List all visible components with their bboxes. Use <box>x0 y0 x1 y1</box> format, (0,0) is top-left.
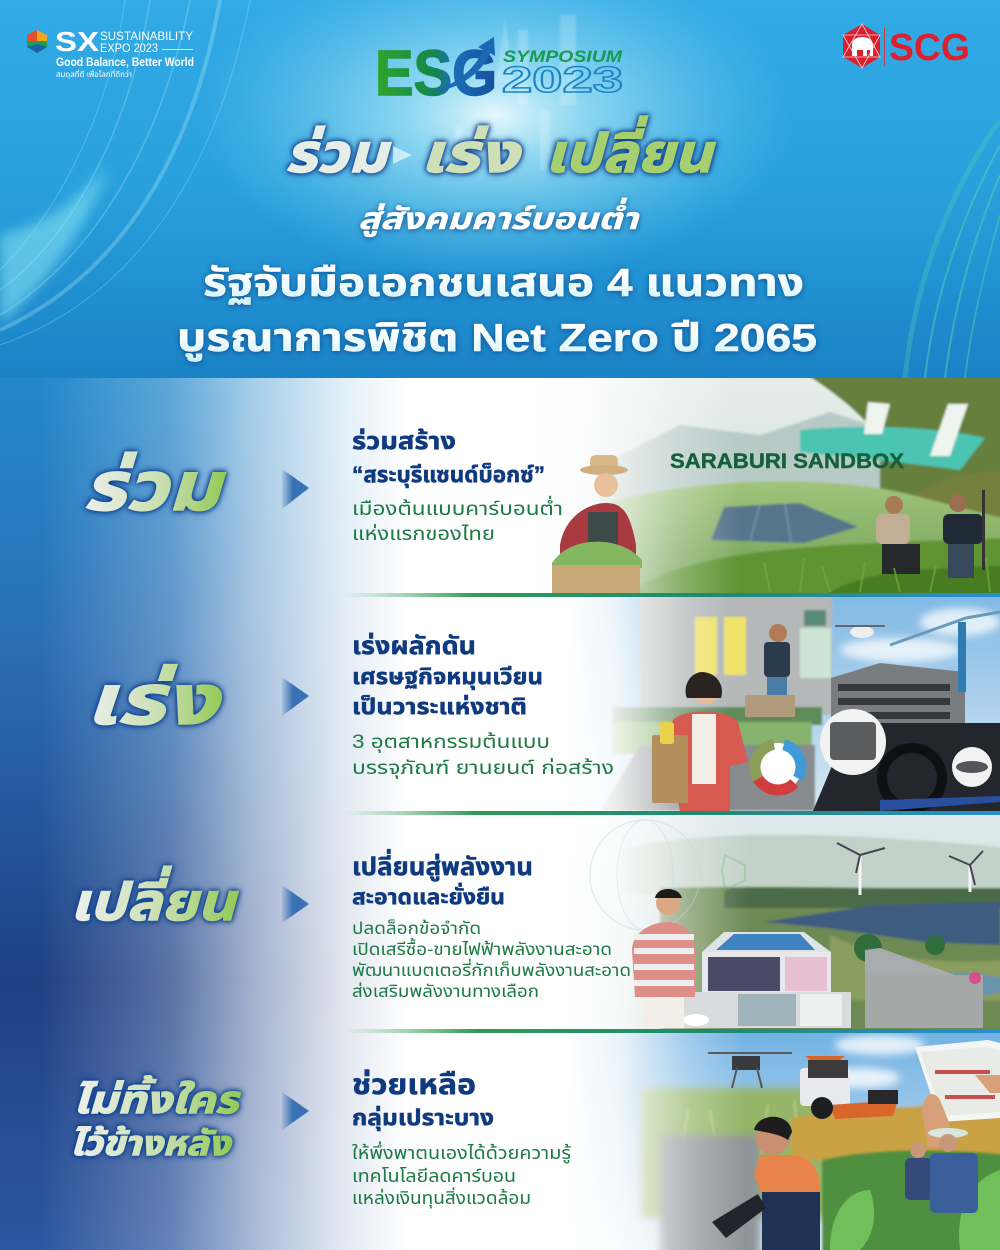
logo: SX Sustainability Expo: SX <box>55 26 99 57</box>
storage container <box>865 948 983 1028</box>
row 1 text: แห่งแรกของไทย <box>352 522 495 545</box>
farmer <box>552 455 642 593</box>
row 4 arrow <box>282 1092 309 1130</box>
logo: SX Sustainability Expo: SUSTAINABILITY <box>100 29 193 43</box>
hand with tablet <box>915 1040 1000 1147</box>
row 2 label: เร่ง <box>85 661 222 739</box>
combine harvester <box>800 1056 898 1119</box>
row 2 text <box>352 632 614 779</box>
row 3 text <box>352 849 631 1001</box>
leaves ground <box>830 1170 1000 1250</box>
row 4 text: ให้พึ่งพาตนเองได้ด้วยความรู้ <box>352 1141 571 1165</box>
car interior <box>813 723 1000 811</box>
row 4 label: ไม่ทิ้งใคร <box>73 1075 241 1122</box>
row 4 text: แหล่งเงินทุนสิ่งแวดล้อม <box>352 1187 531 1209</box>
building and crane <box>831 612 1000 730</box>
logo: SX Sustainability Expo: EXPO 2023 <box>100 41 158 55</box>
row 3 text: เปิดเสรีซื้อ-ขายไฟฟ้าพลังงานสะอาด <box>352 937 612 959</box>
logo: SCG <box>843 24 970 69</box>
panel: scene 4 vulnerable groups image <box>565 1025 1000 1250</box>
product circles <box>820 709 992 787</box>
woman with bag <box>652 672 748 811</box>
row 2 text: เป็นวาระแห่งชาติ <box>352 694 527 719</box>
logo: ESG Symposium 2023: ESG <box>375 37 497 109</box>
heading: join accelerate transform: ร่วม <box>285 124 392 184</box>
panel: header background <box>0 0 1000 378</box>
panel: scene 1 Saraburi sandbox image <box>552 378 1000 593</box>
subheading: สู่สังคมคาร์บอนต่ำ <box>358 197 640 237</box>
row 4 label <box>70 1075 241 1163</box>
logo: ESG Symposium 2023 <box>375 37 623 109</box>
drone <box>708 1052 792 1088</box>
two workers <box>876 490 985 578</box>
row 4 text <box>352 1069 571 1209</box>
label: Saraburi Sandbox: SARABURI SANDBOX <box>670 450 904 473</box>
logo: SCG: SCG <box>889 27 970 69</box>
circular economy wheel <box>750 739 807 796</box>
title <box>177 262 817 361</box>
panel: left column gradient <box>0 378 420 1250</box>
house cutaway <box>683 932 851 1028</box>
row 3 text: พัฒนาแบตเตอรี่กักเก็บพลังงานสะอาด <box>352 958 631 980</box>
title: บูรณาการพิชิต Net Zero ปี 2065 <box>177 317 817 361</box>
row 3 arrow <box>282 885 309 923</box>
row 2 arrow <box>282 677 309 716</box>
logo: ESG Symposium 2023: SYMPOSIUM <box>503 47 623 66</box>
row 1 label: ร่วม <box>83 449 226 525</box>
heading: join accelerate transform <box>285 116 716 184</box>
man with phone <box>632 889 695 1028</box>
logo: SX Sustainability Expo: Good Balance, Better World <box>56 55 194 69</box>
heading: join accelerate transform: เร่ง <box>420 124 522 184</box>
panel: scene 2 circular economy image <box>586 597 1000 811</box>
row 3 text: เปลี่ยนสู่พลังงาน <box>352 849 533 882</box>
row 4 label: ไว้ข้างหลัง <box>70 1125 233 1163</box>
row 1 text: “สระบุรีแซนด์บ็อกซ์” <box>352 462 545 488</box>
recycling worker <box>745 624 795 717</box>
logo: SX Sustainability Expo: สมดุลที่ดี เพื่อโลกที่ดีกว่า <box>56 69 132 80</box>
row 4 text: ช่วยเหลือ <box>352 1069 476 1100</box>
divider lines <box>345 593 1000 1033</box>
panel: scene 3 clean energy image <box>589 815 1000 1029</box>
title: รัฐจับมือเอกชนเสนอ 4 แนวทาง <box>203 262 804 305</box>
row 2 text: 3 อุตสาหกรรมต้นแบบ <box>352 730 550 753</box>
row 3 text: สะอาดและยั่งยืน <box>352 883 505 909</box>
row 2 text: บรรจุภัณฑ์ ยานยนต์ ก่อสร้าง <box>352 756 614 779</box>
row 4 text: เทคโนโลยีลดคาร์บอน <box>352 1166 516 1186</box>
row 1 arrow <box>282 469 309 509</box>
icon: arrow between words <box>393 146 412 164</box>
factory worker <box>712 1117 820 1250</box>
row 3 label: เปลี่ยน <box>70 866 239 932</box>
row 1 text: เมืองต้นแบบคาร์บอนต่ำ <box>352 495 563 520</box>
farmers <box>905 1128 978 1213</box>
logo: ESG Symposium 2023: 2023 <box>502 59 623 100</box>
row 2 text: เร่งผลักดัน <box>352 632 476 660</box>
row 2 text: เศรษฐกิจหมุนเวียน <box>352 664 543 690</box>
wind turbines <box>837 843 983 895</box>
row 1 text: ร่วมสร้าง <box>352 427 456 455</box>
logo: SX Sustainability Expo <box>27 26 194 80</box>
row 3 text: ปลดล็อกข้อจำกัด <box>352 918 481 938</box>
row 4 text: กลุ่มเปราะบาง <box>352 1105 494 1131</box>
row 3 text: ส่งเสริมพลังงานทางเลือก <box>352 982 539 1001</box>
heading: join accelerate transform: เปลี่ยน <box>545 116 716 184</box>
globe hologram <box>590 820 745 930</box>
row 1 text <box>352 427 563 545</box>
